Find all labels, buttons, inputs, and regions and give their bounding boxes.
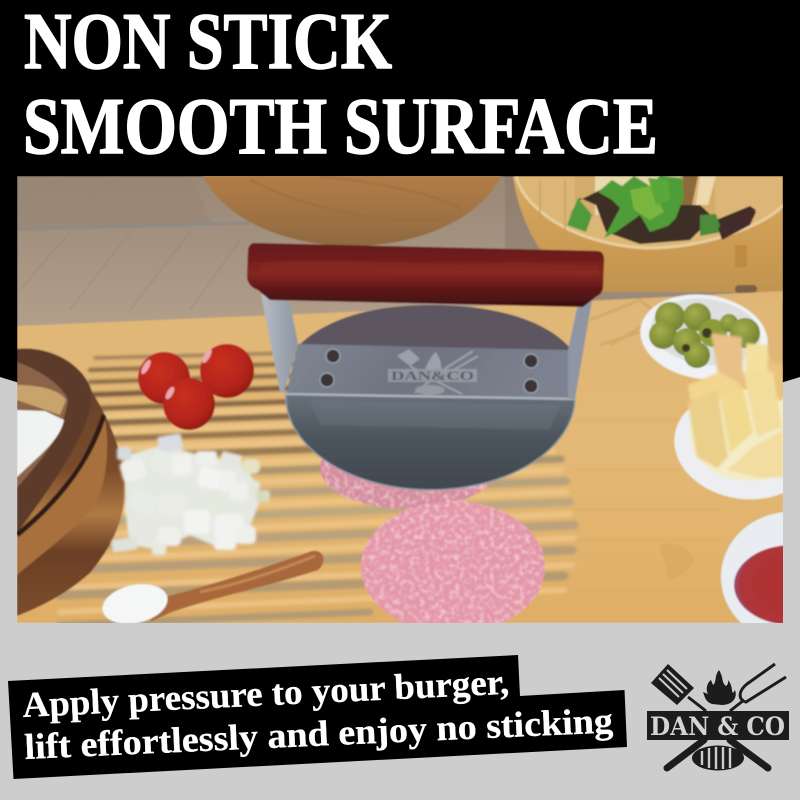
raw burger patty	[361, 501, 545, 633]
burger press	[247, 243, 604, 490]
cherry tomatoes	[138, 344, 254, 430]
caption text: lift effortlessly and enjoy no sticking	[24, 700, 614, 767]
olive dish	[639, 294, 769, 380]
salt in bowl	[17, 410, 64, 477]
title: SMOOTH SURFACE	[23, 83, 658, 171]
wood floor backdrop	[17, 176, 783, 327]
grill	[692, 746, 744, 770]
caption banner	[8, 655, 627, 779]
front plate	[286, 394, 575, 490]
black header background with chevron edge	[0, 0, 800, 500]
flame	[703, 670, 736, 705]
bamboo salad bowl	[513, 176, 783, 293]
rear disc	[300, 304, 570, 351]
logo wordmark: DAN & CO	[650, 712, 785, 741]
board slots	[60, 347, 574, 625]
fries dish	[673, 332, 783, 500]
caption text	[21, 662, 614, 767]
rivets	[320, 349, 538, 393]
title: NON STICK	[24, 0, 392, 86]
caption text: Apply pressure to your burger,	[21, 662, 510, 725]
burger patty under press	[320, 459, 490, 510]
logo: Dan & Co	[647, 664, 789, 770]
large wooden bowl, top centre	[202, 176, 502, 247]
engraved logo on press: DAN&CO	[391, 368, 474, 383]
bracket plate	[286, 344, 568, 399]
salad leaves	[567, 176, 756, 244]
photo: burger press on a bamboo board	[17, 176, 783, 623]
ketchup dish	[720, 511, 783, 623]
carving fork	[667, 664, 786, 768]
wooden spoon with salt	[99, 551, 324, 629]
bamboo cutting board	[17, 291, 790, 623]
wooden handle	[247, 243, 604, 307]
diced onion pile	[111, 433, 270, 555]
spatula	[651, 664, 768, 768]
engraved logo on press	[388, 349, 478, 395]
fries	[688, 333, 783, 478]
left bracket leg	[261, 294, 298, 393]
logo banner	[647, 711, 789, 740]
walnut bowl, left	[17, 348, 125, 616]
right bracket leg	[568, 300, 592, 399]
title	[23, 0, 658, 171]
